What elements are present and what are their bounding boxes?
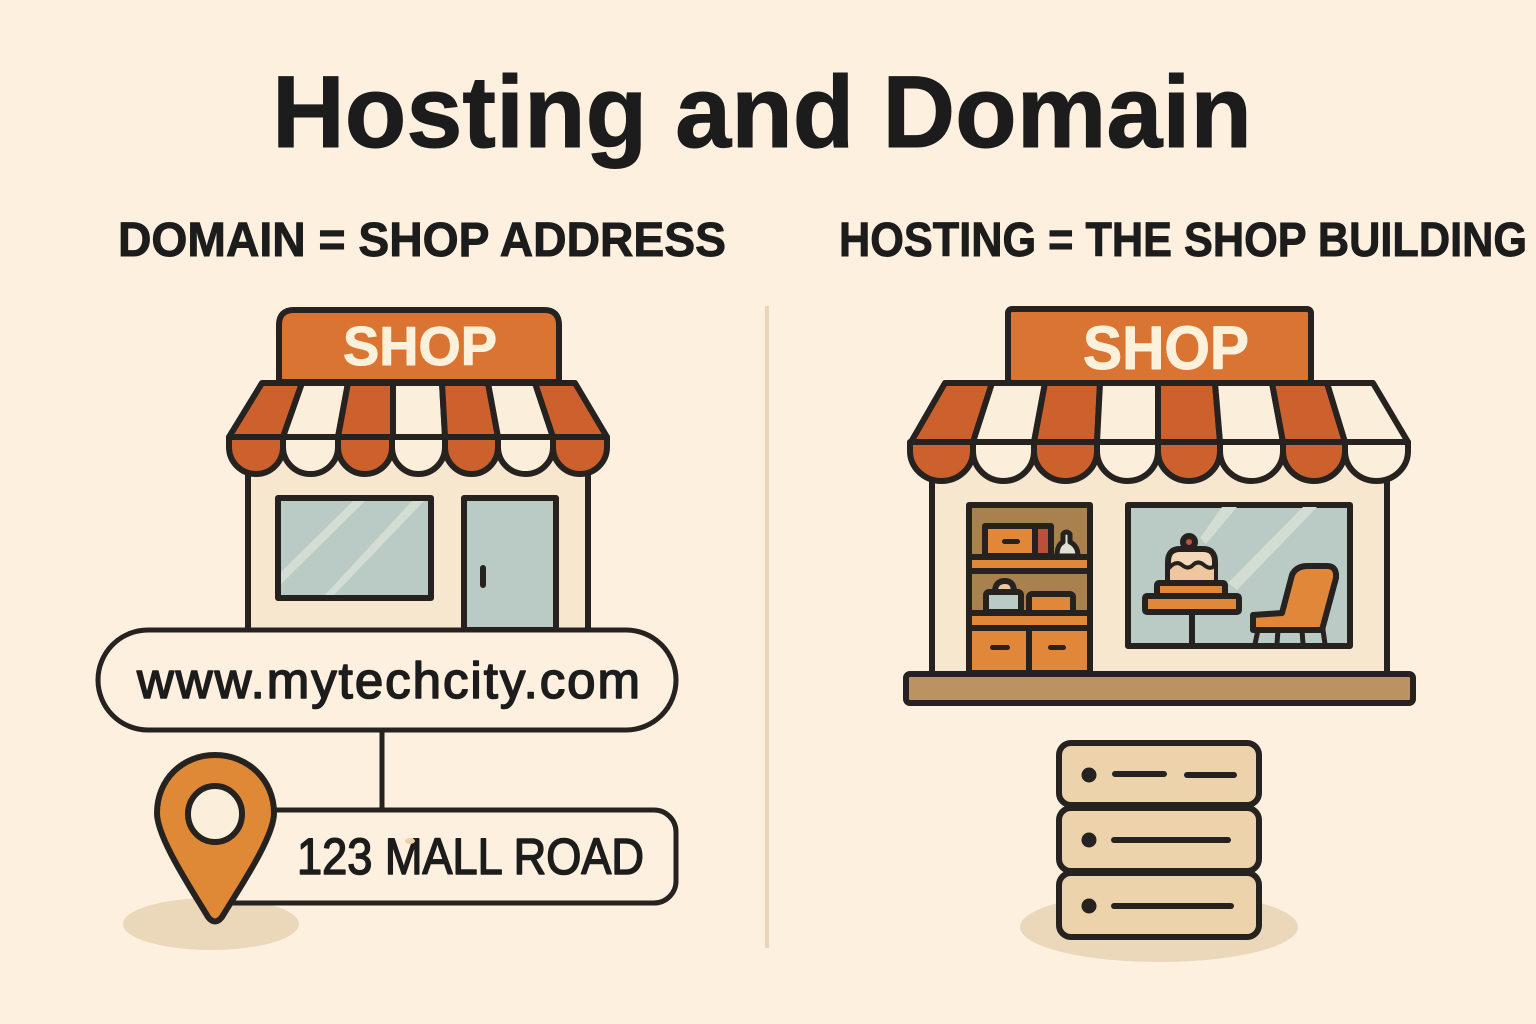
- heading: domain: DOMAIN = SHOP ADDRESS: [118, 214, 726, 267]
- chair: [1253, 566, 1336, 644]
- icon: server stack: [1059, 743, 1259, 937]
- bag: [995, 581, 1014, 592]
- shop wall: [248, 450, 588, 630]
- server unit 1: [1059, 743, 1259, 805]
- red book: [1035, 526, 1051, 556]
- shop sign: SHOP: [343, 315, 497, 377]
- small box: [1029, 594, 1073, 613]
- shop sign: SHOP: [1083, 314, 1249, 382]
- display window: [1128, 505, 1350, 646]
- shop sign: [279, 310, 559, 382]
- drawers: [969, 628, 1029, 673]
- icon: detailed shop: [906, 309, 1413, 703]
- server shadow: [1020, 892, 1298, 962]
- address bar: [200, 810, 676, 903]
- cake: [1157, 536, 1225, 596]
- map pin shadow: [123, 898, 299, 950]
- panel: domain: [98, 310, 676, 950]
- address bar: 123 MALL ROAD: [297, 828, 644, 885]
- shop wall: [932, 455, 1387, 675]
- striped awning: [910, 383, 1408, 481]
- shop sign: [1008, 309, 1311, 383]
- orange box: [985, 526, 1035, 556]
- icon: simple shop: [229, 310, 607, 630]
- title: Hosting and Domain: [272, 55, 1252, 169]
- shop door: [464, 498, 556, 630]
- server unit 2: [1059, 808, 1259, 871]
- url bar: www.mytechcity.com: [136, 652, 640, 709]
- shop window: [278, 498, 431, 598]
- striped awning: [229, 383, 607, 474]
- connector: [380, 731, 384, 810]
- bottle: [1057, 532, 1078, 556]
- server unit 3: [1059, 873, 1259, 937]
- panel: hosting: [906, 309, 1413, 962]
- url bar: [98, 630, 676, 730]
- table: [1145, 596, 1239, 646]
- floor base: [906, 674, 1413, 703]
- icon: map pin: [157, 755, 274, 922]
- shelf unit: [969, 505, 1090, 673]
